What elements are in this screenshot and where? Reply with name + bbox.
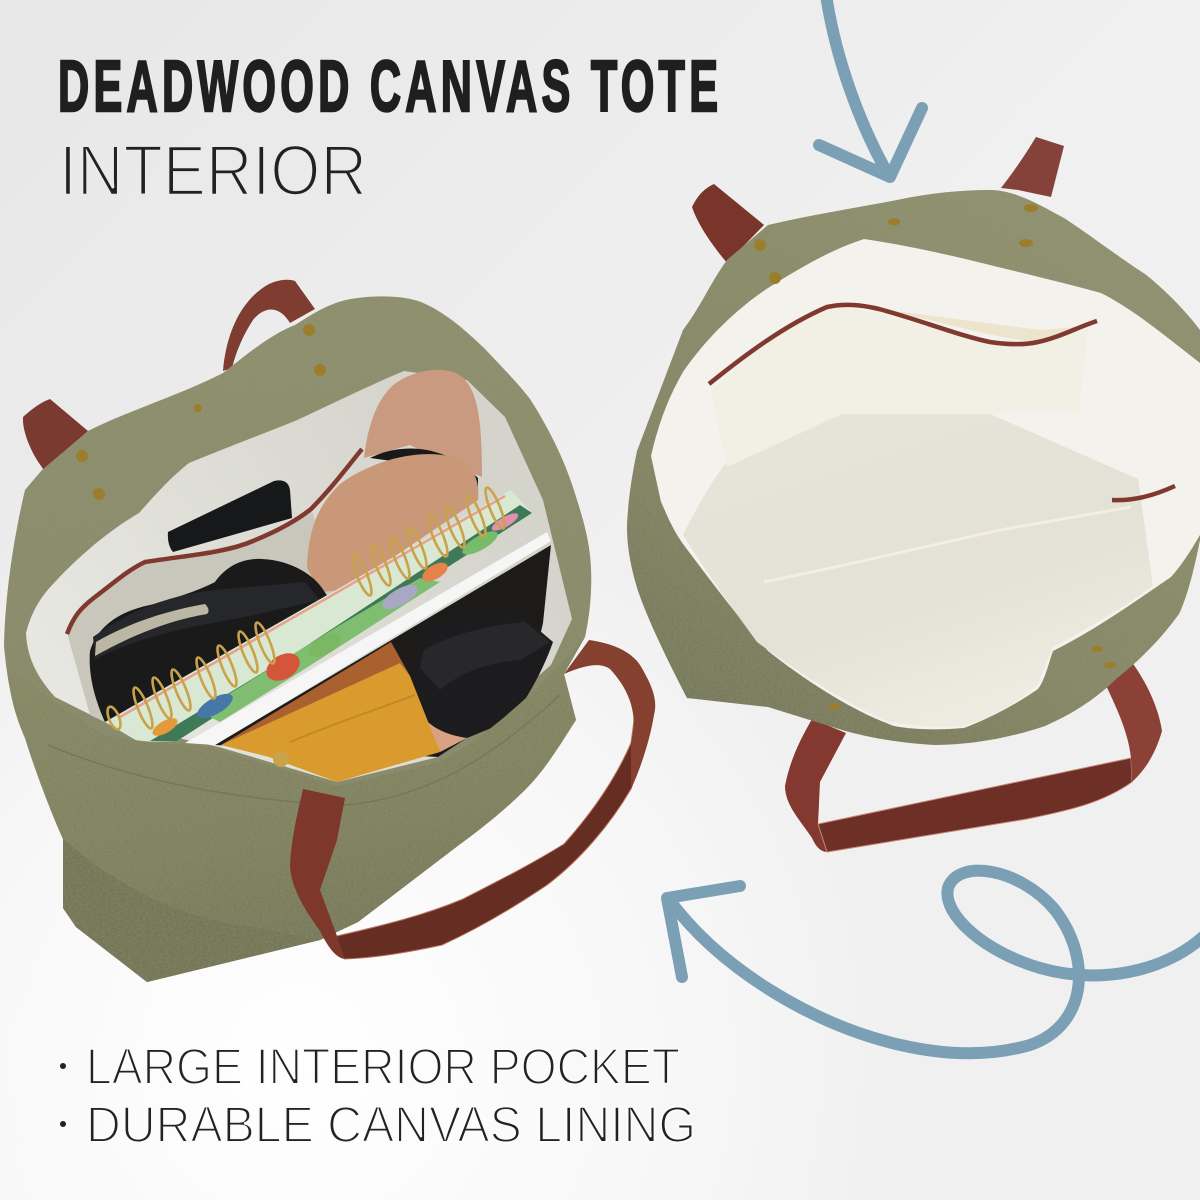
- right bag: empty tote: [627, 137, 1200, 852]
- left bag front handle: [290, 640, 655, 959]
- left bag back handle, left: [23, 399, 88, 470]
- dark interior behind divider: [215, 545, 551, 757]
- right bag side strap: [1112, 486, 1175, 500]
- phone: [168, 480, 292, 552]
- left bag stitching line: [48, 695, 560, 805]
- right bag top-left handle: [692, 184, 764, 263]
- right bag pocket leather edge: [709, 305, 1097, 384]
- left bag interior lining: [26, 371, 572, 782]
- left bag pocket panel: [67, 509, 340, 722]
- water bottle base: [421, 711, 480, 752]
- handle underside long strap: [334, 706, 638, 959]
- handle front tab: [290, 789, 345, 959]
- left bag front rim and panel overlap: [8, 637, 585, 982]
- notebook cover: [105, 490, 532, 742]
- arrow: top arrow pointing into right bag: [819, 0, 922, 177]
- left bag bottom panel shading: [63, 839, 320, 982]
- pocket leather edge: [67, 449, 362, 634]
- black shoe gap: [370, 448, 478, 490]
- left bag back handle, right: [223, 280, 315, 371]
- pouch fold shadow: [290, 695, 415, 742]
- left bag: packed tote: [4, 280, 655, 982]
- left bag rivets: [76, 324, 326, 500]
- water bottle lid highlight: [420, 622, 550, 690]
- sandal strap: [93, 582, 320, 660]
- right bag top-right handle: [1001, 137, 1064, 197]
- subtitle: INTERIOR: [59, 132, 367, 211]
- left bag canvas body: [4, 296, 591, 982]
- notebook floral cover strip: [150, 505, 532, 741]
- arrow: looping arrow pointing to left bag: [667, 871, 1200, 1053]
- right bag interior pocket: [711, 307, 1088, 467]
- right bag interior white lining: [651, 239, 1200, 729]
- notebook pink page edge: [120, 496, 505, 717]
- right bag floor seam: [764, 507, 1131, 582]
- water bottle lid: [415, 612, 553, 738]
- bottom handle dark strap: [818, 758, 1132, 852]
- bottom handle right tab: [1103, 661, 1162, 782]
- right bag lining floor: [683, 414, 1153, 727]
- bottom handle left tab: [785, 719, 846, 852]
- pouch zipper pull: [273, 751, 289, 767]
- right bag rivets: [754, 204, 1116, 710]
- bullet: large interior pocket: LARGE INTERIOR POCKET: [86, 1038, 680, 1095]
- black sandals: [90, 559, 330, 722]
- brown item behind pouch: [221, 642, 410, 745]
- tan shoe, back: [364, 370, 482, 477]
- spiral binding rings: [105, 486, 508, 731]
- right bag bottom handle: [785, 661, 1162, 852]
- sandal metallic buckle: [95, 604, 209, 656]
- right bag shadow behind pocket edge: [879, 309, 1090, 342]
- handle upper loop: [564, 640, 655, 789]
- yellow pouch: [221, 663, 440, 782]
- bullet list: [60, 1038, 696, 1153]
- title: DEADWOOD CANVAS TOTE: [58, 46, 718, 127]
- notebook white backing board: [185, 532, 551, 745]
- tan shoe, front: [307, 454, 478, 592]
- bullet: durable canvas lining: DURABLE CANVAS LINING: [86, 1096, 696, 1153]
- right bag canvas body: [627, 190, 1200, 745]
